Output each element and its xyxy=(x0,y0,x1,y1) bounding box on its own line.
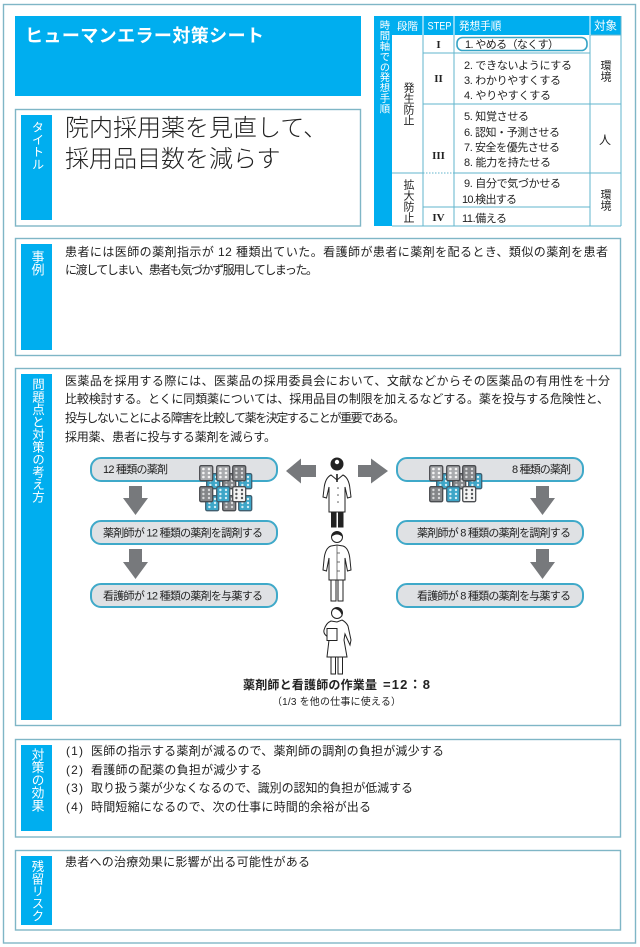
step: pharmacist 8: 薬剤師が 8 種類の薬剤を調剤する xyxy=(417,526,571,540)
step: nurse 8: 看護師が 8 種類の薬剤を与薬する xyxy=(417,588,571,602)
stage labels: 拡大防止 xyxy=(402,178,414,223)
tag: residual risk xyxy=(21,856,52,925)
step: 8 kinds: 8 種類の薬剤 xyxy=(512,462,571,476)
heading: sheet title: ヒューマンエラー対策シート xyxy=(25,26,264,46)
procedure list xyxy=(462,38,572,225)
panel: case example xyxy=(16,238,620,356)
tag: effects: 対策の効果 xyxy=(30,748,44,812)
panel: problems and approach xyxy=(16,368,620,726)
table header row: 発想手順 xyxy=(459,20,502,32)
procedure list: 10.検出する xyxy=(462,192,517,206)
target labels: 環境 xyxy=(599,189,612,212)
case text xyxy=(65,244,608,277)
table: ideation procedure xyxy=(374,16,621,226)
note: one third: （1/3 を他の仕事に使える） xyxy=(272,695,401,708)
icon: doctor xyxy=(323,458,351,528)
approach text: 医薬品を採用する際には、医薬品の採用委員会において、文献などからその医薬品の有用性を十分 xyxy=(65,374,610,388)
effects list xyxy=(66,743,444,814)
target labels xyxy=(599,60,612,212)
arrow: down xyxy=(123,486,148,515)
procedure list: 8. 能力を持たせる xyxy=(464,155,551,169)
header banner xyxy=(15,16,361,96)
table header row: 段階 xyxy=(397,20,418,32)
title text: 院内採用薬を見直して、 xyxy=(65,115,327,142)
workload ratio: 薬剤師と看護師の作業量 xyxy=(243,677,377,692)
highlighted step 1 xyxy=(457,38,587,50)
workload ratio xyxy=(243,677,430,708)
approach text: 採用薬、患者に投与する薬剤を減らす。 xyxy=(65,429,276,444)
step: nurse 8 xyxy=(397,584,583,607)
approach text: 比較検討する。とくに同類薬については、採用品目の制限を加えるなどする。薬を投与する危険性と、 xyxy=(65,391,609,406)
step numerals xyxy=(432,39,445,224)
icon: pharmacist xyxy=(323,532,351,601)
step: pharmacist 8 xyxy=(397,521,583,544)
tag: title xyxy=(21,115,52,220)
panel: title xyxy=(16,110,360,226)
procedure list: 5. 知覚させる xyxy=(464,109,529,123)
step: nurse 12 xyxy=(91,584,277,607)
icon: nurse xyxy=(324,608,351,674)
arrow: down xyxy=(530,486,555,515)
icon: 12 blister packs xyxy=(200,466,252,511)
procedure list: 6. 認知・予測させる xyxy=(464,125,560,139)
effects list: (3) xyxy=(66,781,83,795)
step numerals: I xyxy=(436,39,441,51)
tag: effects xyxy=(21,745,52,831)
procedure list: 3. わかりやすくする xyxy=(464,74,561,87)
stage labels xyxy=(402,81,414,223)
time axis label: 時間軸での発想手順 xyxy=(378,20,390,114)
title text: 採用品目数を減らす xyxy=(65,146,281,173)
panel: residual risk xyxy=(16,850,620,930)
approach text xyxy=(65,374,610,444)
effects list: (4) xyxy=(66,800,83,814)
procedure list: 1. やめる（なくす） xyxy=(465,38,559,51)
effects list: 時間短縮になるので、次の仕事に時間的余裕が出る xyxy=(91,799,371,814)
step numerals: IV xyxy=(432,212,445,224)
procedure list: 9. 自分で気づかせる xyxy=(464,176,561,190)
table header row: STEP xyxy=(428,20,452,32)
workload ratio: =12：8 xyxy=(383,677,430,692)
step: 12 kinds xyxy=(91,458,277,481)
effects list: (2) xyxy=(66,763,83,777)
panel: effects xyxy=(16,740,620,837)
case text: に渡してしまい、患者も気づかず服用してしまった。 xyxy=(65,262,318,277)
step: nurse 12: 看護師が 12 種類の薬剤を与薬する xyxy=(103,588,263,602)
step: pharmacist 12 xyxy=(91,521,277,544)
tag: case: 事例 xyxy=(30,250,44,276)
procedure list: 2. できないようにする xyxy=(464,59,572,72)
case text: 患者には医師の薬剤指示が 12 種類出ていた。看護師が患者に薬剤を配るとき、類似の薬剤を患者 xyxy=(65,244,608,259)
arrow: left xyxy=(286,458,316,484)
table header row: 対象 xyxy=(594,20,617,32)
approach text: 投与しないことによる障害を比較して薬を決定することが重要である。 xyxy=(65,410,405,425)
procedure list: 11.備える xyxy=(462,212,507,225)
flow: 12 drugs xyxy=(91,458,277,607)
table header row xyxy=(397,20,617,32)
effects list: (1) xyxy=(66,744,83,758)
effects list: 取り扱う薬が少なくなるので、識別の認知的負担が低減する xyxy=(91,780,413,795)
tag: title: タイトル xyxy=(30,121,44,170)
step numerals: III xyxy=(432,150,445,162)
arrow: right xyxy=(358,458,388,484)
procedure list: 4. やりやすくする xyxy=(464,89,551,102)
stage labels: 発生防止 xyxy=(402,81,414,125)
step: 8 kinds xyxy=(397,458,583,481)
target labels: 人 xyxy=(599,133,611,147)
tag: case xyxy=(21,244,52,350)
risk text: 患者への治療効果に影響が出る可能性がある xyxy=(65,854,310,869)
effects list: 看護師の配薬の負担が減少する xyxy=(91,762,262,777)
flow: 8 drugs xyxy=(397,458,583,607)
tag: residual risk: 残留リスク xyxy=(30,860,44,922)
step numerals: II xyxy=(434,73,443,85)
target labels: 環境 xyxy=(599,60,612,83)
effects list: 医師の指示する薬剤が減るので、薬剤師の調剤の負担が減少する xyxy=(91,743,444,758)
arrow: down xyxy=(123,549,148,579)
icon: 8 blister packs xyxy=(430,466,482,502)
step: pharmacist 12: 薬剤師が 12 種類の薬剤を調剤する xyxy=(103,526,263,540)
arrow: down xyxy=(530,549,555,579)
step: 12 kinds: 12 種類の薬剤 xyxy=(103,462,168,476)
tag: problems xyxy=(21,374,52,720)
procedure list: 7. 安全を優先させる xyxy=(464,140,560,154)
tag: problems: 問題点と対策の考え方 xyxy=(30,378,44,503)
